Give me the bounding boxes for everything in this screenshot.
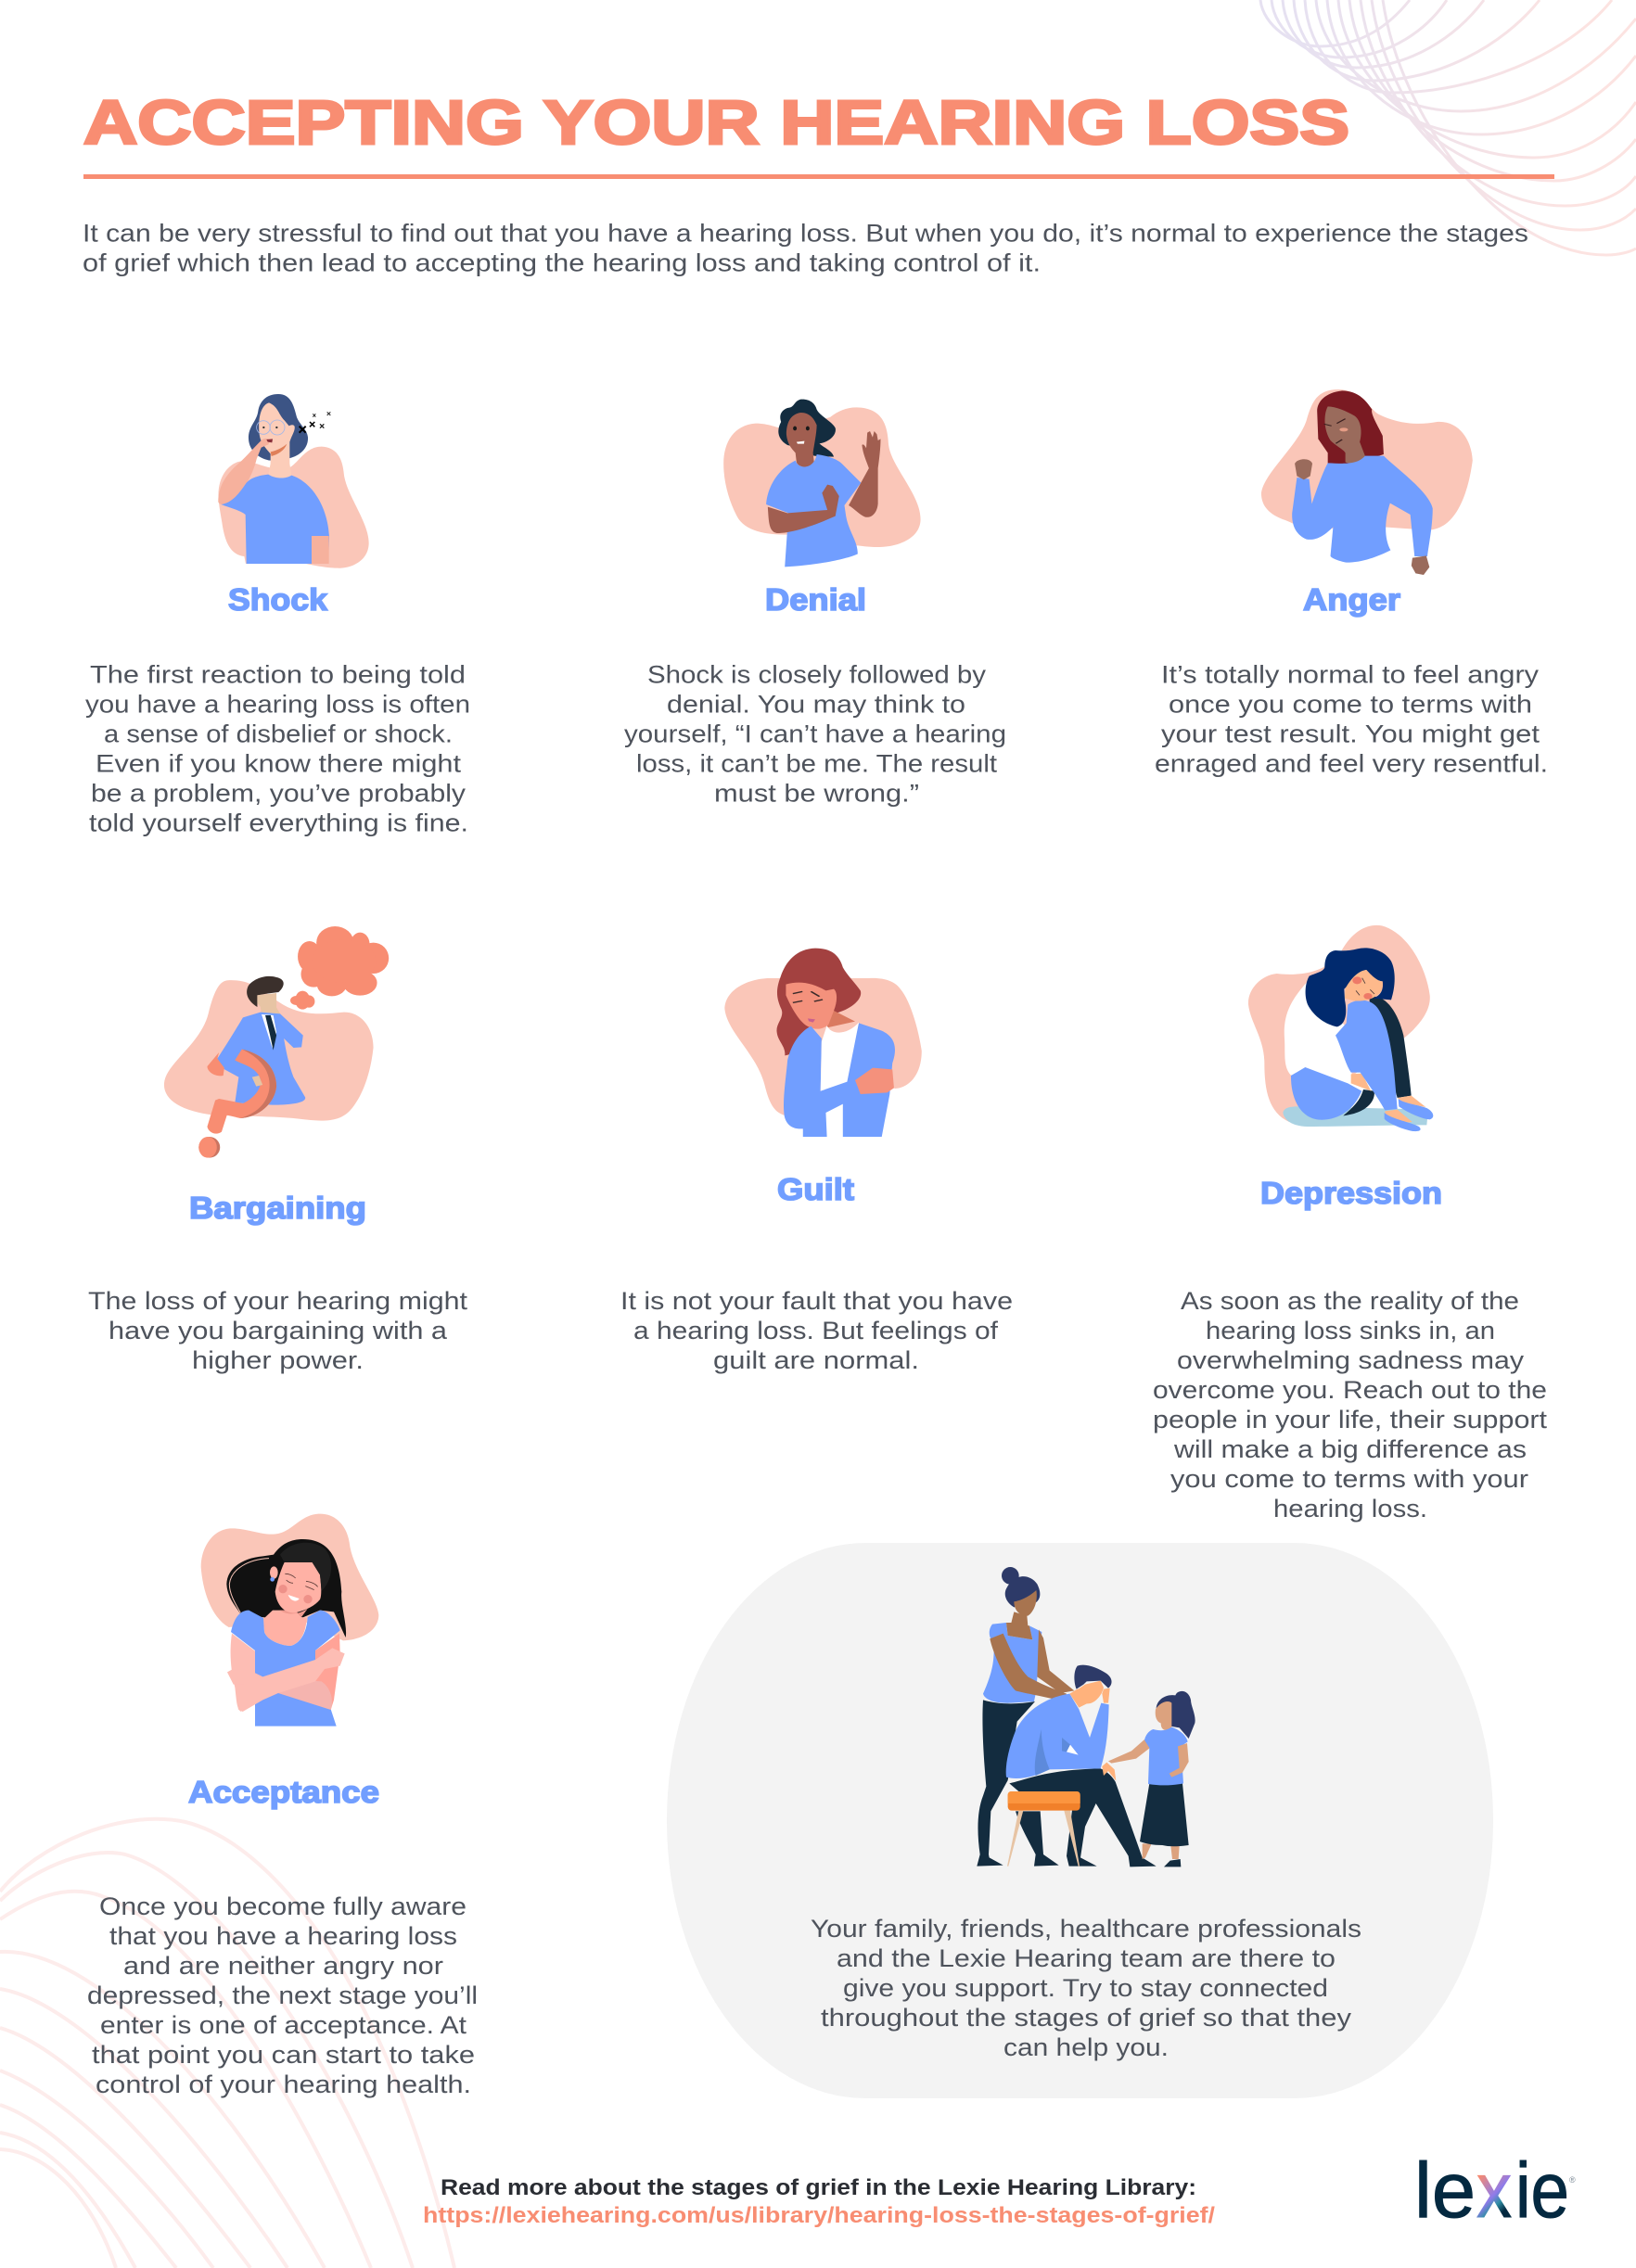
text: guilt	[620, 1287, 1013, 1374]
text: acceptance: control of your hearing health.	[96, 2071, 471, 2098]
heading: guilt: Guilt	[777, 1172, 854, 1206]
text: depression: hearing loss sinks in, an	[1206, 1317, 1495, 1344]
text: depression: you come to terms with your	[1170, 1465, 1528, 1493]
logo: lexie: le	[1414, 2147, 1476, 2234]
text: acceptance: enter is one of acceptance. At	[100, 2011, 467, 2039]
panel: anger	[1155, 389, 1548, 777]
text: depression: overcome you. Reach out to the	[1153, 1376, 1547, 1404]
text: anger: once you come to terms with	[1169, 690, 1532, 718]
logo: lexie: x	[1476, 2147, 1512, 2234]
heading: shock: Shock	[228, 582, 328, 617]
intro text: of grief which then lead to accepting the hearing loss and taking control of it.	[83, 248, 1041, 276]
footer text: Read more about the stages of grief in the Lexie Hearing Library:	[441, 2175, 1196, 2200]
icon: family comforting a seated man	[977, 1567, 1195, 1867]
text: denial: loss, it can’t be me. The result	[636, 749, 998, 777]
text: support message: give you support. Try to stay connected	[843, 1974, 1328, 2002]
text: denial: must be wrong.”	[714, 779, 919, 807]
text: guilt: It is not your fault that you have	[620, 1287, 1013, 1315]
text: shock: Even if you know there might	[96, 749, 462, 777]
panel: guilt	[620, 949, 1013, 1374]
text: guilt: a hearing loss. But feelings of	[633, 1317, 999, 1344]
text: anger: It’s totally normal to feel angry	[1161, 660, 1540, 688]
text: anger	[1155, 660, 1548, 777]
icon: woman hugging herself	[201, 1514, 378, 1726]
text: shock	[85, 660, 470, 836]
text: support message: throughout the stages of grief so that they	[821, 2004, 1352, 2032]
text: depression: As soon as the reality of the	[1181, 1287, 1519, 1315]
panel: acceptance	[87, 1514, 478, 2098]
text: bargaining: The loss of your hearing might	[88, 1287, 468, 1315]
text: anger: enraged and feel very resentful.	[1155, 749, 1548, 777]
text: bargaining: higher power.	[192, 1346, 364, 1374]
text: support message: Your family, friends, healthcare professionals	[811, 1915, 1361, 1943]
heading: anger: Anger	[1303, 582, 1400, 617]
icon: woman hugging knees	[1248, 925, 1433, 1131]
text: denial: Shock is closely followed by	[647, 660, 987, 688]
text: depression: hearing loss.	[1273, 1495, 1427, 1523]
text: shock: be a problem, you’ve probably	[91, 779, 467, 807]
text: shock: told yourself everything is fine.	[89, 809, 468, 836]
icon: woman raising hands	[723, 400, 921, 567]
logo: lexie	[1414, 2147, 1576, 2234]
footer text: https://lexiehearing.com/us/library/hearing-loss-the-stages-of-grief/	[423, 2203, 1215, 2228]
text: support message: and the Lexie Hearing team are there to	[837, 1944, 1336, 1972]
text: guilt: guilt are normal.	[713, 1346, 919, 1374]
text: acceptance: that you have a hearing loss	[109, 1922, 457, 1950]
panel: depression	[1153, 925, 1548, 1523]
text: acceptance: Once you become fully aware	[99, 1892, 467, 1920]
text: acceptance: and are neither angry nor	[123, 1952, 443, 1980]
text: anger: your test result. You might get	[1161, 720, 1540, 747]
text: bargaining: have you bargaining with a	[109, 1317, 448, 1344]
text: depression: will make a big difference as	[1173, 1435, 1527, 1463]
heading: depression: Depression	[1260, 1176, 1442, 1210]
text: acceptance: that point you can start to take	[92, 2041, 475, 2069]
text: shock: you have a hearing loss is often	[85, 690, 470, 718]
logo: lexie: ie	[1515, 2147, 1569, 2234]
text: depression	[1153, 1287, 1548, 1523]
text: bargaining	[88, 1287, 468, 1374]
text: denial	[624, 660, 1006, 807]
intro text	[83, 219, 1528, 276]
text: shock: The first reaction to being told	[90, 660, 466, 688]
text: depression: people in your life, their support	[1153, 1406, 1548, 1433]
icon: angry woman	[1261, 389, 1473, 575]
footer text	[423, 2175, 1215, 2228]
panel: bargaining	[88, 926, 468, 1374]
text: depression: overwhelming sadness may	[1177, 1346, 1525, 1374]
icon: woman looking down	[724, 949, 922, 1137]
text: support message	[811, 1915, 1361, 2061]
text: denial: denial. You may think to	[667, 690, 965, 718]
title: ACCEPTING YOUR HEARING LOSS	[83, 88, 1349, 158]
panel: shock	[85, 394, 470, 836]
logo: lexie: ®	[1569, 2175, 1576, 2185]
icon: man with question mark and thought cloud	[164, 926, 389, 1158]
heading: bargaining: Bargaining	[189, 1191, 366, 1225]
text: shock: a sense of disbelief or shock.	[104, 720, 453, 747]
icon: shocked woman	[218, 394, 369, 568]
panel: denial	[624, 400, 1006, 807]
panel: support network	[667, 1543, 1493, 2098]
intro text: It can be very stressful to find out that you have a hearing loss. But when you do, it’s normal to experience the stages	[83, 219, 1528, 247]
text: acceptance: depressed, the next stage you’ll	[87, 1981, 478, 2009]
text: denial: yourself, “I can’t have a hearing	[624, 720, 1006, 747]
heading: denial: Denial	[765, 582, 866, 617]
heading: acceptance: Acceptance	[188, 1775, 379, 1809]
text: acceptance	[87, 1892, 478, 2098]
text: support message: can help you.	[1003, 2033, 1169, 2061]
